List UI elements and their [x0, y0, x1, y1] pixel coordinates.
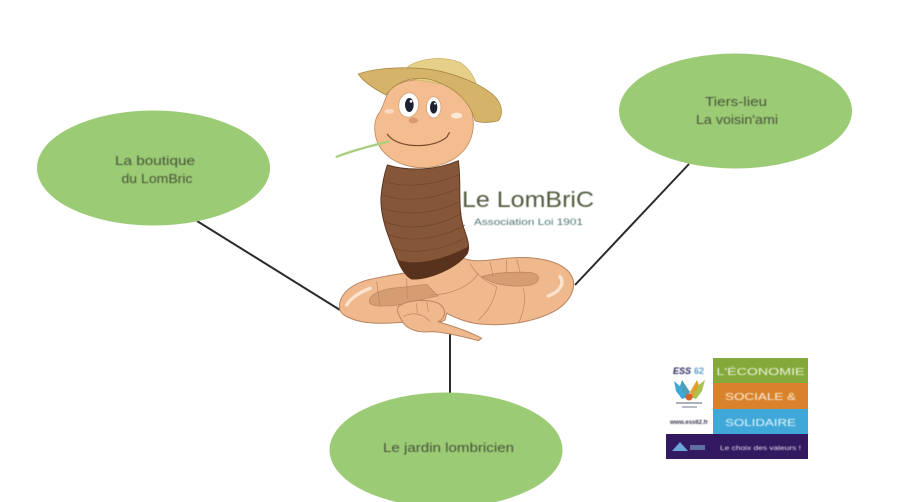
band: L'économie: [713, 358, 808, 383]
node: La boutique du LomBric: du LomBric: [122, 172, 192, 186]
ESS 62 mark: ESS: [673, 366, 691, 376]
connector: tiers-lieu to worm: [575, 164, 689, 285]
node: Tiers-lieu La voisin'ami: La voisin'ami: [696, 113, 778, 127]
connector: jardin to worm: [449, 333, 451, 393]
worm mascot: [337, 59, 574, 341]
band: solidaire: SOLIDAIRE: [725, 417, 796, 429]
logo title: Le LomBric: Le LomBriC: [462, 187, 594, 212]
band: sociale: [713, 383, 808, 409]
grass stem: [337, 142, 388, 157]
worm eyes: [397, 91, 441, 119]
band: le choix des valeurs: Le choix des valeurs !: [720, 445, 801, 452]
worm coil: [339, 257, 574, 341]
connector: boutique to worm: [197, 221, 340, 310]
band: le choix des valeurs: [666, 434, 808, 459]
node: Le jardin lombricien: [330, 392, 562, 502]
band: solidaire: [713, 409, 808, 434]
worm hat: [358, 59, 501, 122]
ESS 62 mark: www.ess62.fr: [669, 420, 709, 426]
band: sociale: SOCIALE &: [725, 391, 796, 403]
worm body: [381, 161, 469, 279]
band: L'économie: L'ÉCONOMIE: [716, 365, 804, 378]
ESS 62 mark: 62: [694, 366, 704, 376]
worm head: [337, 79, 473, 168]
ESS badge: [666, 358, 808, 459]
worm tail: [398, 300, 482, 341]
node: Tiers-lieu La voisin'ami: [619, 54, 852, 168]
node: La boutique du LomBric: [37, 110, 270, 226]
node: Le jardin lombricien: Le jardin lombricien: [383, 441, 514, 455]
logo subtitle: Association Loi 1901: [474, 217, 583, 227]
node: Tiers-lieu La voisin'ami: Tiers-lieu: [705, 95, 767, 109]
ESS 62 mark: [669, 366, 709, 426]
node: La boutique du LomBric: La boutique: [115, 154, 195, 168]
